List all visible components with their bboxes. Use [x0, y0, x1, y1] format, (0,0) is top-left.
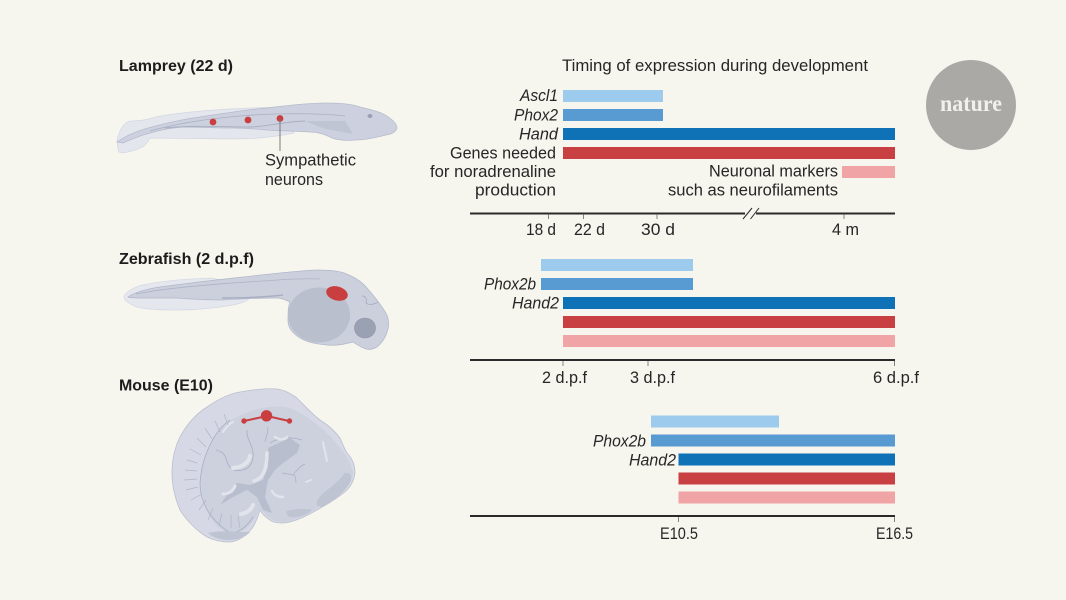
gene labels: zebrafish: Phox2b — [484, 276, 536, 294]
axis: zebrafish: 3 d.p.f — [630, 369, 675, 387]
gene labels: zebrafish — [484, 276, 559, 312]
icon: zebrafish embryo — [124, 270, 389, 349]
heading: zebrafish: Zebrafish (2 d.p.f) — [119, 251, 254, 268]
icon: red ganglia chain — [241, 410, 292, 424]
gene labels: lamprey: for noradrenaline — [430, 163, 556, 181]
gene labels: zebrafish: Hand2 — [512, 294, 559, 312]
panel: mouse illustration — [119, 378, 355, 542]
bars: zebrafish — [541, 259, 895, 347]
gene labels: lamprey: such as neurofilaments — [668, 182, 838, 200]
label: sympathetic neurons: neurons — [265, 171, 323, 189]
gene labels: lamprey: Ascl1 — [519, 87, 558, 105]
icon: mouse embryo — [172, 389, 355, 542]
axis: lamprey: 22 d — [574, 221, 605, 239]
axis: lamprey — [470, 208, 895, 239]
label: sympathetic neurons: Sympathetic — [265, 152, 356, 170]
gene labels: lamprey: Hand — [519, 126, 559, 144]
axis: lamprey: 4 m — [832, 221, 859, 239]
icon: darker shading patches — [208, 473, 351, 540]
icon: lamprey body — [117, 103, 397, 153]
heading: mouse: Mouse (E10) — [119, 378, 213, 394]
gene labels: lamprey — [430, 87, 838, 200]
axis: lamprey: 30 d — [641, 221, 675, 239]
gene labels: lamprey: Phox2 — [514, 106, 558, 124]
chart title: Timing of expression during development — [562, 57, 868, 75]
axis: zebrafish — [470, 360, 919, 387]
icon: embryo highlights — [223, 422, 327, 514]
axis: zebrafish: 2 d.p.f — [542, 369, 587, 387]
leader line — [279, 119, 281, 151]
axis: mouse: E10.5 — [660, 525, 698, 543]
axis: zebrafish: 6 d.p.f — [873, 369, 919, 387]
gene labels: lamprey: production — [475, 182, 556, 200]
axis: mouse: E16.5 — [876, 525, 913, 543]
panel: lamprey illustration — [117, 58, 397, 189]
label: sympathetic neurons — [265, 152, 356, 189]
gene labels: mouse: Phox2b — [593, 433, 646, 451]
gene labels: mouse: Hand2 — [629, 452, 676, 470]
bars: lamprey — [563, 90, 895, 178]
logo: nature: nature — [940, 91, 1002, 116]
gene labels: lamprey: Genes needed — [450, 145, 556, 163]
axis: mouse — [470, 516, 913, 543]
icon: red neuron cluster — [325, 284, 349, 303]
gene labels: mouse — [593, 433, 676, 470]
chart: mouse timing — [470, 416, 913, 543]
heading: lamprey: Lamprey (22 d) — [119, 58, 233, 75]
panel: zebrafish illustration — [119, 251, 389, 349]
icon: sympathetic neuron markers — [210, 115, 283, 125]
axis: lamprey: 18 d — [526, 221, 556, 239]
logo: nature — [926, 60, 1016, 150]
gene labels: lamprey: Neuronal markers — [709, 163, 838, 181]
chart: lamprey timing — [430, 87, 895, 239]
chart: zebrafish timing — [470, 259, 919, 387]
bars: mouse — [651, 416, 895, 504]
